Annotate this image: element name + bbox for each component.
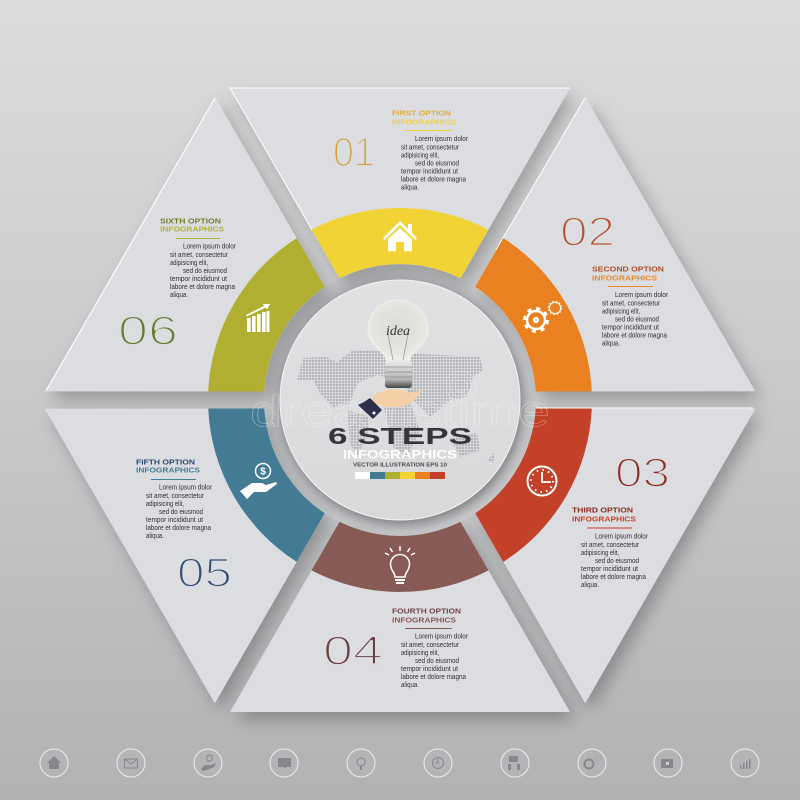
body 02: aliqua. [602, 340, 620, 348]
body 01: labore et dolore magna [401, 176, 466, 184]
footer icon: bulb [347, 749, 375, 777]
body 05 [146, 484, 213, 540]
watermark [250, 371, 550, 436]
body 05: aliqua. [146, 533, 164, 540]
number 01: 01 [333, 129, 375, 175]
body 06: aliqua. [170, 292, 188, 299]
body 02: labore et dolore magna [602, 332, 667, 340]
sector 4 brown [312, 522, 488, 592]
panel 1 text [333, 108, 469, 192]
icon: bar chart with arrow [246, 304, 270, 332]
hand [373, 389, 422, 407]
heading 04: FOURTH OPTION [392, 606, 461, 616]
body 06: tempor incididunt ut [170, 276, 227, 283]
footer icon: clock [424, 749, 452, 777]
dotted world map [297, 350, 495, 463]
body 03: Lorem ipsum dolor [595, 534, 649, 540]
center ring [264, 264, 536, 536]
heading 02: SECOND OPTION [592, 264, 664, 274]
body 02: sed do eiusmod [615, 316, 659, 324]
subtitle: INFOGRAPHICS: INFOGRAPHICS [343, 450, 457, 462]
body 01: Lorem ipsum dolor [415, 136, 469, 143]
body 03: labore et dolore magna [581, 574, 646, 581]
panel 6 text [118, 216, 237, 354]
bulb base [385, 360, 412, 388]
icon: hand with coin [240, 464, 277, 499]
panel 4 text: INFOGRAPHICS [392, 616, 456, 624]
body 06: sit amet, consectetur [170, 252, 229, 259]
footer icon: chart [731, 749, 759, 777]
body 03: sit amet, consectetur [581, 542, 640, 549]
body 05: sed do eiusmod [159, 509, 203, 516]
body 04: labore et dolore magna [401, 674, 466, 681]
center disc [280, 280, 520, 520]
body 04: sit amet, consectetur [401, 642, 460, 649]
panel 1 text: INFOGRAPHICS [392, 118, 456, 126]
icon: light bulb [385, 546, 415, 583]
body 04 [401, 634, 469, 689]
watermark: dreamstime [250, 387, 550, 436]
sector 2 orange [461, 227, 610, 416]
body 03: adipisicing elit, [581, 550, 619, 557]
caption: VECTOR ILLUSTRATION EPS 10 [353, 462, 447, 468]
title: 6 STEPS: 6 STEPS [328, 423, 472, 449]
body 03: sed do eiusmod [595, 558, 639, 565]
body 02: Lorem ipsum dolor [615, 292, 669, 299]
body 01: sit amet, consectetur [401, 144, 460, 152]
footer icon: hand coin [194, 749, 222, 777]
panel 5 text [136, 458, 232, 596]
body 01: tempor incididunt ut [401, 168, 458, 176]
colour bar [355, 472, 445, 479]
body 05: Lorem ipsum dolor [159, 484, 213, 492]
body 01: adipisicing elit, [401, 152, 439, 160]
body 03: tempor incididunt ut [581, 566, 638, 573]
body 01 [401, 136, 469, 192]
heading 01: FIRST OPTION [392, 108, 451, 118]
body 03: aliqua. [581, 582, 599, 589]
number 05: 05 [177, 550, 232, 596]
number 02: 02 [560, 208, 615, 254]
number 06: 06 [118, 308, 178, 354]
body 06: adipisicing elit, [170, 260, 208, 267]
icon: idea bulb on hand [358, 300, 428, 419]
body 01: aliqua. [401, 184, 419, 192]
bulb glass [368, 300, 428, 360]
number 03: 03 [615, 450, 670, 496]
body 03 [581, 534, 649, 589]
panel 2 text [560, 208, 669, 348]
body 05: tempor incididunt ut [146, 517, 203, 524]
body 02 [602, 292, 669, 348]
cuff [358, 398, 382, 419]
body 02: sit amet, consectetur [602, 300, 661, 308]
icon: hand with coin: $ [260, 466, 266, 478]
heading 05: FIFTH OPTION [136, 458, 195, 466]
body 01: sed do eiusmod [415, 160, 459, 168]
footer icon: mail [117, 749, 145, 777]
heading 06: SIXTH OPTION [160, 216, 221, 226]
icon: gears [525, 302, 561, 331]
body 06: sed do eiusmod [183, 268, 227, 275]
panel 3 text [572, 450, 670, 589]
sector 5 teal [190, 384, 339, 573]
idea label: idea [386, 324, 410, 339]
body 04: tempor incididunt ut [401, 666, 458, 673]
body 02: adipisicing elit, [602, 308, 640, 316]
icon: clock [528, 466, 556, 496]
number 04: 04 [323, 628, 383, 674]
footer icon: team [501, 749, 529, 777]
body 04: aliqua. [401, 682, 419, 689]
body 05: sit amet, consectetur [146, 493, 205, 500]
footer icon: gears [578, 749, 606, 777]
heading 03: THIRD OPTION [572, 506, 633, 514]
sector 6 olive [190, 227, 339, 416]
panel 6 text: INFOGRAPHICS [160, 224, 224, 234]
footer icon: home [40, 749, 68, 777]
sector 1 yellow [312, 208, 488, 278]
body 05: labore et dolore magna [146, 525, 211, 532]
bottom icon row [40, 749, 759, 777]
body 06: Lorem ipsum dolor [183, 244, 237, 250]
body 04: sed do eiusmod [415, 658, 459, 665]
body 04: adipisicing elit, [401, 650, 439, 657]
panel 5 text: INFOGRAPHICS [136, 466, 200, 474]
panel 3 text: INFOGRAPHICS [572, 514, 636, 524]
body 04: Lorem ipsum dolor [415, 634, 469, 640]
body 06: labore et dolore magna [170, 284, 235, 291]
icon: home [383, 221, 417, 251]
hexagon of six triangle panels [45, 88, 755, 712]
panel 4 text [323, 606, 469, 689]
panel 2 text: INFOGRAPHICS [592, 274, 657, 282]
footer icon: speech [270, 749, 298, 777]
body 06 [170, 244, 237, 299]
sector 3 red [461, 384, 610, 573]
body 02: tempor incididunt ut [602, 324, 659, 332]
footer icon: camera [654, 749, 682, 777]
body 05: adipisicing elit, [146, 501, 184, 508]
